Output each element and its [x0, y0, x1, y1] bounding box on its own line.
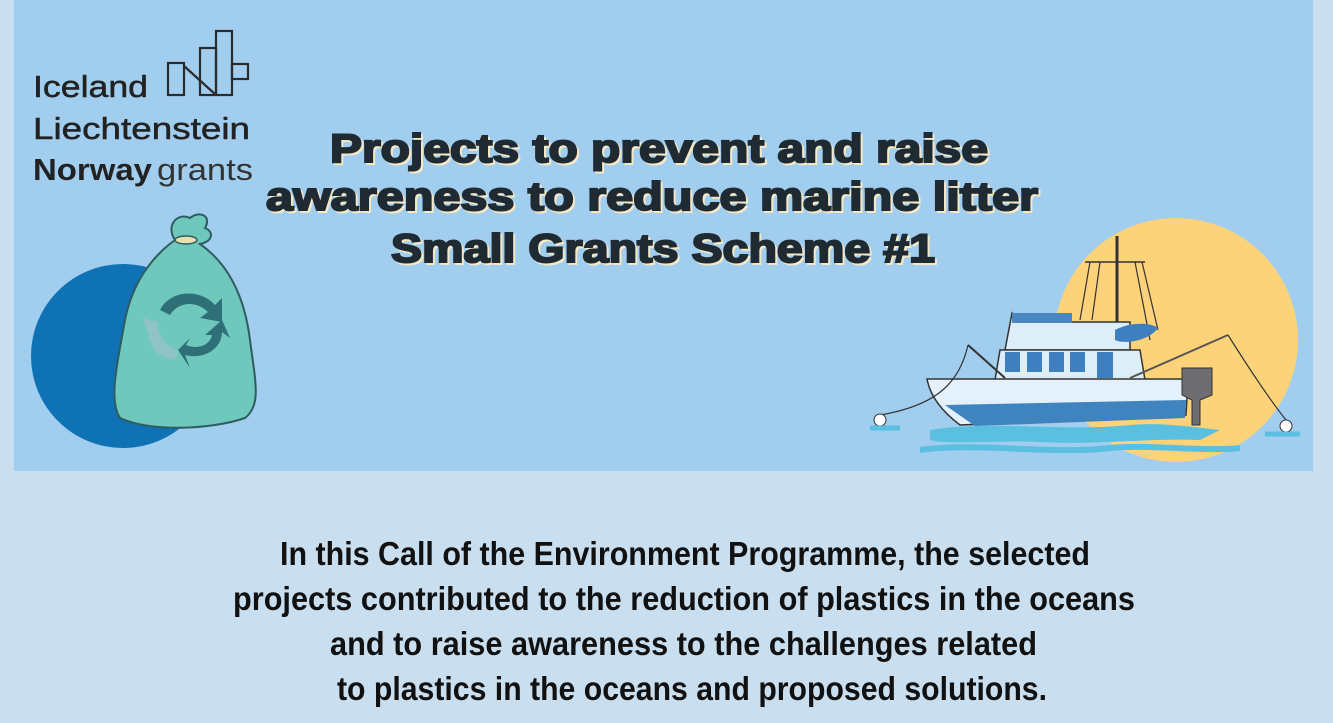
text block: programme description: In this Call of the Environment Programme, the selected [280, 535, 1090, 572]
title: awareness to reduce marine litter [266, 175, 1038, 219]
title [266, 127, 1040, 273]
text block: programme description: and to raise awareness to the challenges related [330, 625, 1037, 662]
icon: sun circle with boat [870, 218, 1300, 462]
title: Projects to prevent and raise [330, 127, 988, 171]
panel: header banner [14, 0, 1313, 471]
text block: programme description: to plastics in the oceans and proposed solutions. [337, 670, 1047, 707]
text block: programme description [233, 535, 1135, 707]
logo: EEA grants: Norway [33, 152, 153, 187]
text block: programme description: projects contributed to the reduction of plastics in the oceans [233, 580, 1135, 617]
title: Small Grants Scheme #1 [393, 229, 937, 273]
title: awareness to reduce marine litter [268, 177, 1040, 221]
title: Projects to prevent and raise [332, 129, 990, 173]
logo: EEA grants: Iceland [33, 69, 148, 104]
logo: EEA grants [33, 31, 253, 187]
title: Small Grants Scheme #1 [391, 227, 935, 271]
logo: EEA grants: Liechtenstein [33, 111, 250, 146]
logo: EEA grants: grants [157, 152, 253, 187]
icon: blue circle with recycling bag [31, 214, 256, 448]
